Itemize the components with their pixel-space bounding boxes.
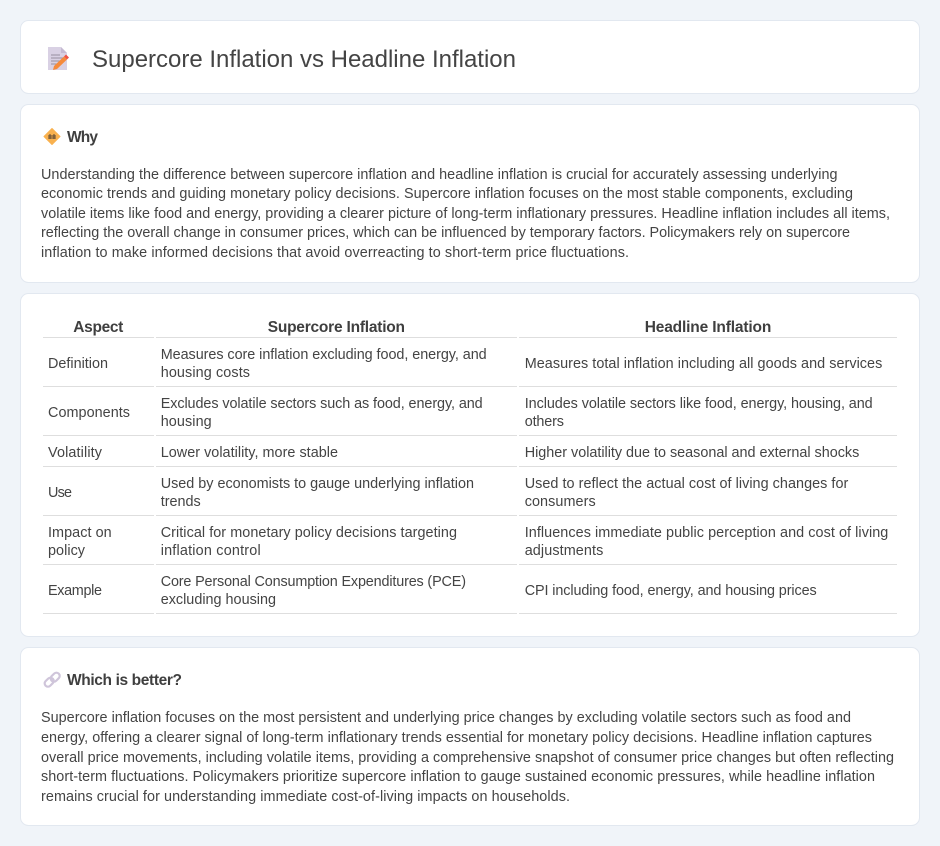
row: use: Used by economists to gauge underlying inflation: [161, 476, 474, 492]
text block: which is better paragraph: remains crucial for understanding immediate cost-of-living impacts on households.: [41, 789, 570, 805]
text block: which is better paragraph: short-term fluctuations. Policymakers prioritize supercore inflation to gauge sustained economic pressures, while headline inflation: [41, 769, 875, 785]
row: use: Use: [48, 485, 72, 501]
row: components: others: [525, 414, 564, 430]
text block: why paragraph: economic trends and guiding monetary policy decisions. Supercore inflation focuses on the most stable components, excluding: [41, 186, 853, 202]
row: example: CPI including food, energy, and housing prices: [525, 583, 817, 599]
row: example: excluding housing: [161, 592, 276, 608]
row: components: [48, 396, 873, 430]
row: volatility: [48, 445, 859, 461]
row: impact on policy: inflation control: [161, 543, 261, 559]
row: definition: Measures total inflation including all goods and services: [525, 356, 882, 372]
row: components: Excludes volatile sectors such as food, energy, and: [161, 396, 483, 412]
row: volatility: Lower volatility, more stable: [161, 445, 338, 461]
text block: why paragraph: inflation to make informed decisions that avoid overreacting to short-term price fluctuations.: [41, 245, 629, 261]
row: volatility: Higher volatility due to seasonal and external shocks: [525, 445, 859, 461]
text block: which is better paragraph: [41, 710, 894, 805]
header panel: [20, 20, 920, 94]
row: use: trends: [161, 494, 201, 510]
row: impact on policy: Influences immediate public perception and cost of living: [525, 525, 888, 541]
heading: which is better: Which is better?: [67, 672, 182, 689]
text block: why paragraph: [41, 167, 890, 261]
row: definition: housing costs: [161, 365, 250, 381]
text block: why paragraph: Understanding the difference between supercore inflation and headline inflation is crucial for accurately assessing underlying: [41, 167, 838, 183]
row: components: Includes volatile sectors like food, energy, housing, and: [525, 396, 873, 412]
icon: warning diamond: [44, 128, 60, 144]
row: example: Core Personal Consumption Expenditures (PCE): [161, 574, 466, 590]
row: use: [48, 476, 849, 510]
heading: why: Why: [67, 129, 98, 146]
row: impact on policy: Impact on: [48, 525, 112, 541]
row: impact on policy: policy: [48, 543, 86, 559]
table header row: Headline Inflation: [645, 319, 771, 336]
text block: which is better paragraph: overall price movements, including volatile items, providing a comprehensive snapshot of consumer price changes but often reflecting: [41, 750, 894, 766]
row: use: Used to reflect the actual cost of living changes for: [525, 476, 849, 492]
row: definition: Definition: [48, 356, 108, 372]
text block: why paragraph: volatile items like food and energy, providing a clearer picture of long-term inflationary pressures. Headline inflation includes all items,: [41, 206, 890, 222]
row: use: consumers: [525, 494, 596, 510]
panel: comparison table: [20, 294, 920, 636]
row: definition: Measures core inflation excluding food, energy, and: [161, 347, 487, 363]
title: Supercore Inflation vs Headline Inflation: [92, 46, 516, 73]
row: components: Components: [48, 405, 130, 421]
panel: why: [20, 104, 920, 282]
icon: document with pencil: [48, 47, 69, 70]
text block: why paragraph: reflecting the overall change in consumer prices, which can be influenced by temporary factors. Policymakers rely on supercore: [41, 225, 850, 241]
icon: chain link: [43, 671, 61, 688]
row: example: Example: [48, 583, 102, 599]
table header row: Supercore Inflation: [268, 319, 405, 336]
row: impact on policy: Critical for monetary policy decisions targeting: [161, 525, 457, 541]
row: impact on policy: [48, 525, 888, 559]
row: components: housing: [161, 414, 212, 430]
table header row: [73, 319, 771, 336]
text block: which is better paragraph: energy, offering a clearer signal of long-term inflationary trends essential for monetary policy decisions. Headline inflation captures: [41, 730, 872, 746]
row: volatility: Volatility: [48, 445, 103, 461]
table header row: Aspect: [73, 319, 123, 336]
row: example: [48, 574, 817, 608]
row: impact on policy: adjustments: [525, 543, 603, 559]
panel: which is better: [20, 648, 920, 826]
text block: which is better paragraph: Supercore inflation focuses on the most persistent and underlying price changes by excluding volatile sectors such as food and: [41, 710, 851, 726]
row: definition: [48, 347, 882, 381]
